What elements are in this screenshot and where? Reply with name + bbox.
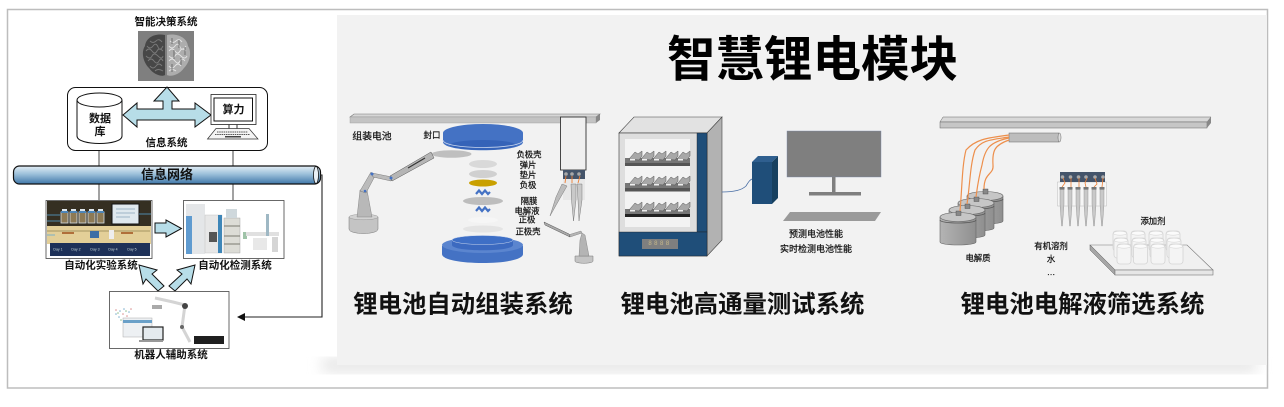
- bottom blue disc: [442, 236, 523, 263]
- heading: electrolyte system: 锂电池电解液筛选系统: [961, 292, 1204, 318]
- additive tray and jars: [1090, 231, 1213, 275]
- connecting wire: [722, 179, 752, 192]
- robot assistant photo: [110, 292, 229, 348]
- decision system heading: 智能决策系统: [134, 15, 198, 28]
- electrolyte labels: 有机溶剂: [1034, 241, 1068, 251]
- automated experiment photo: Day 4: [108, 248, 118, 252]
- information system label: 信息系统: [146, 136, 188, 149]
- robot label: 机器人辅助系统: [134, 348, 208, 361]
- experiment label: 自动化实验系统: [64, 258, 138, 272]
- automated experiment photo: Day 1: [53, 248, 63, 252]
- gantry rail: [350, 114, 600, 123]
- test labels: [780, 228, 852, 254]
- automated experiment photo: Day 2: [71, 248, 81, 252]
- assembly labels: 正极: [519, 214, 536, 224]
- connector lines: [99, 139, 233, 200]
- module: high-throughput testing: [619, 117, 881, 318]
- arrow: experiment to detection: [155, 220, 182, 237]
- test labels: 实时检测电池性能: [780, 243, 852, 254]
- electrolyte labels: …: [1047, 267, 1055, 277]
- electrolyte labels: [965, 216, 1166, 277]
- multichannel pipette: [1058, 172, 1106, 226]
- left robot arm: [349, 152, 434, 234]
- electrolyte labels: 添加剂: [1140, 216, 1166, 226]
- dispensing head: [1009, 133, 1061, 142]
- assembly labels: 弹片: [520, 160, 536, 170]
- small robot arm: [544, 222, 593, 263]
- electrolyte labels: 电解质: [965, 253, 991, 263]
- detection label: 自动化检测系统: [198, 258, 272, 272]
- module: electrolyte screening: [940, 117, 1213, 318]
- automated experiment photo: [46, 200, 152, 258]
- test chamber: [619, 117, 722, 256]
- test labels: 预测电池性能: [789, 228, 843, 239]
- top blue disc: [443, 124, 523, 150]
- automated experiment photo: Day 5: [127, 248, 137, 252]
- bidirectional arrow: [123, 87, 211, 127]
- title: 智慧锂电模块: [667, 33, 958, 87]
- arrow: robot to detection: [169, 265, 195, 291]
- heading: testing system: 锂电池高通量测试系统: [621, 292, 864, 318]
- display: 8888: [648, 241, 672, 247]
- information network pipe: [14, 166, 320, 184]
- assembly labels: 垫片: [520, 170, 536, 180]
- computing monitor: 算力: [222, 102, 244, 116]
- automated detection photo: [184, 200, 284, 258]
- assembly labels: 封口: [423, 130, 441, 140]
- assembly labels: 隔膜: [521, 196, 538, 206]
- assembly labels: [352, 130, 542, 236]
- electrolyte drums: [940, 189, 1003, 245]
- panel: smart lithium modules: [337, 15, 1267, 365]
- heading: assembly system: 锂电池自动组装系统: [353, 292, 573, 318]
- assembly labels: 组装电池: [352, 130, 392, 142]
- assembly labels: 负极壳: [516, 150, 542, 160]
- orange tubes: [960, 135, 1009, 211]
- assembly labels: 正极壳: [515, 226, 541, 236]
- monitor and keyboard: [783, 131, 881, 221]
- information system box: [68, 87, 268, 150]
- database cylinder: 数据: [89, 111, 111, 125]
- right pipette unit: [550, 117, 586, 221]
- host tower: [752, 156, 778, 204]
- database cylinder: 库: [94, 124, 106, 138]
- assembly labels: 负极: [520, 180, 537, 190]
- brain image: [138, 31, 194, 81]
- assembly labels: 电解液: [514, 206, 540, 216]
- computing monitor: [208, 94, 258, 139]
- automated experiment photo: Day 3: [90, 248, 100, 252]
- information network pipe: 信息网络: [141, 167, 193, 182]
- arrow: robot to experiment: [139, 265, 164, 291]
- feedback arrow to robot: [237, 175, 322, 321]
- module: automatic battery assembly: [349, 114, 600, 318]
- electrolyte labels: 水: [1047, 254, 1056, 264]
- panel shadow: [322, 358, 1257, 372]
- gantry rail: [940, 117, 1211, 128]
- shelves: [625, 151, 690, 217]
- battery layers: [432, 150, 503, 232]
- panel: system architecture: [14, 15, 322, 361]
- database cylinder: [77, 93, 122, 144]
